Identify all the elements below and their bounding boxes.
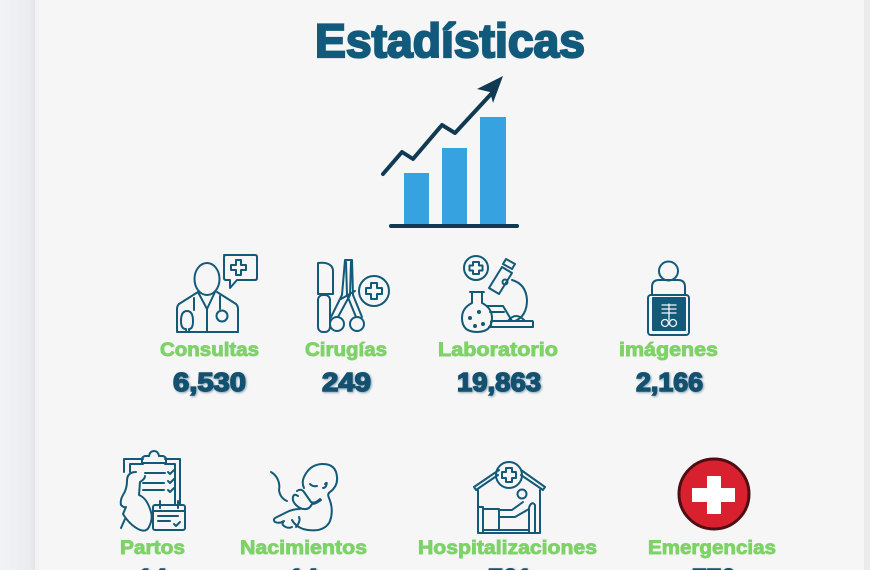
stat: Nacimientos — [240, 464, 367, 570]
stat: Emergencias — [648, 459, 776, 570]
label: imágenes — [619, 339, 718, 361]
icon: rising bar chart with arrow — [383, 76, 517, 226]
icon: microscope and flask — [462, 256, 533, 332]
icon: red cross — [679, 459, 749, 529]
icon: clipboard, pregnant woman and calendar — [121, 451, 185, 531]
value: 2,166 — [636, 367, 703, 397]
title: Estadísticas — [315, 14, 585, 67]
label: Partos — [120, 537, 185, 559]
stat: Cirugías — [305, 260, 389, 397]
stat: Consultas — [160, 255, 259, 397]
label: Nacimientos — [240, 537, 367, 559]
label: Consultas — [160, 339, 259, 361]
icon: hospital with bed — [474, 462, 545, 533]
stat: Partos — [120, 451, 185, 570]
icon: doctor — [177, 255, 257, 332]
value: 19,863 — [457, 367, 541, 397]
value: 6,530 — [173, 367, 246, 397]
label: Hospitalizaciones — [418, 537, 597, 559]
label: Cirugías — [305, 339, 387, 361]
label: Emergencias — [648, 537, 776, 559]
icon: x-ray panel — [648, 262, 689, 335]
stat: Hospitalizaciones — [418, 462, 597, 570]
value: 249 — [322, 367, 371, 397]
stat: imágenes — [619, 262, 718, 397]
icon: scalpel and scissors — [318, 260, 389, 332]
icon: fetus — [271, 464, 337, 530]
label: Laboratorio — [438, 339, 558, 361]
stat: Laboratorio — [438, 256, 558, 397]
